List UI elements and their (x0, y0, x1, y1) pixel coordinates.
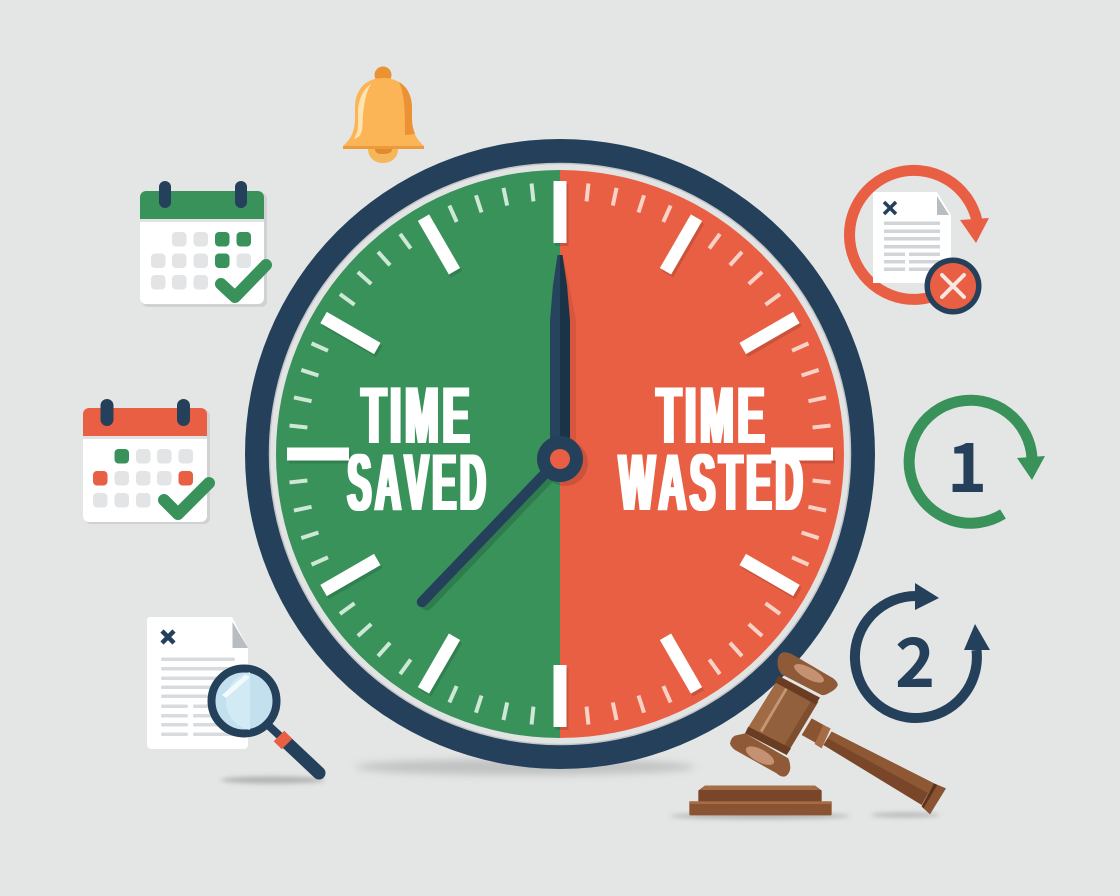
loop arrow (850, 170, 989, 299)
hour marks (287, 181, 833, 727)
magnifier shadow (221, 776, 325, 784)
heading: time wasted: WASTED (619, 438, 806, 528)
clock face: green half time saved (276, 170, 560, 738)
document (873, 192, 951, 283)
heading: time saved (348, 370, 490, 528)
icon: navy loop with number 2: 2 (895, 608, 935, 707)
reject badge (924, 258, 982, 314)
clock (245, 139, 875, 769)
minute hand (550, 255, 576, 445)
gavel shadows (670, 813, 850, 819)
heading: time wasted: TIME (656, 370, 768, 461)
minute ticks red side (587, 183, 831, 725)
hour hand (422, 458, 565, 605)
heading: time wasted (619, 370, 806, 528)
icon: green loop with number 1: 1 (947, 413, 987, 512)
gavel sound block (689, 786, 832, 815)
icon: navy loop with number 2 (855, 583, 990, 718)
heading: time saved: TIME (362, 370, 473, 461)
gavel head (730, 652, 838, 777)
clock hub (537, 436, 588, 486)
icon: bell (343, 66, 424, 163)
icon: red calendar with check (83, 399, 210, 524)
heading: time saved: SAVED (348, 438, 490, 528)
icon: green loop with number 1 (909, 400, 1045, 523)
icon: document under magnifier (147, 617, 325, 784)
icon: green calendar with check (140, 181, 267, 307)
icon: gavel (670, 652, 946, 819)
gavel sound block and handle (689, 718, 946, 815)
clock outer ring (245, 139, 875, 769)
clock inner bezel (270, 164, 850, 744)
check mark (221, 265, 266, 297)
document (147, 617, 248, 749)
clock floor shadow (355, 759, 695, 775)
check mark (164, 483, 209, 514)
clock face: red half time wasted (560, 170, 844, 738)
icon: rejected document with loop arrow (850, 170, 989, 314)
magnifying glass (212, 668, 319, 773)
gavel handle (802, 718, 946, 814)
minute ticks green side (289, 183, 533, 725)
